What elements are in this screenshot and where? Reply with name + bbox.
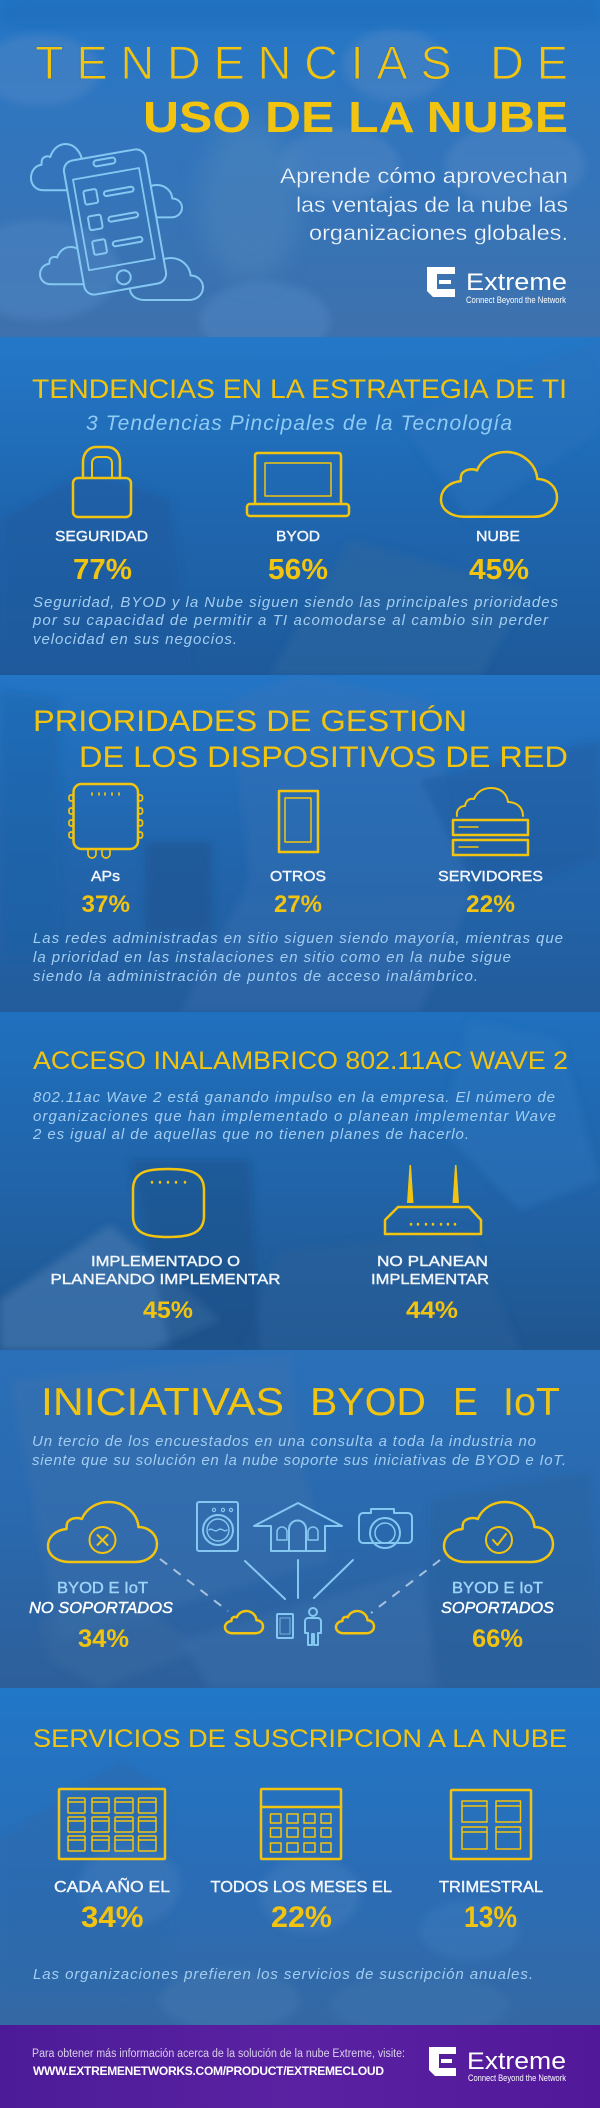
link: extreme networks url: WWW.EXTREMENETWORKS.COM/PRODUCT/EXTREMECLOUD	[33, 2064, 384, 2078]
heading: ACCESO INALAMBRICO 802.11AC WAVE 2	[33, 1047, 568, 1075]
value: 13%: 13%	[464, 1901, 517, 1934]
label: byod: BYOD	[276, 528, 320, 545]
text block: intro: Aprende cómo aprovechan	[280, 164, 568, 188]
text block: priorities summary: la prioridad en las instalaciones en sitio como en la nube sigue	[33, 949, 511, 966]
value: 44%: 44%	[406, 1297, 458, 1324]
label: servidores: SERVIDORES	[438, 868, 543, 885]
label: byod no soportados: BYOD E IoT	[57, 1580, 148, 1597]
text block: intro	[280, 164, 568, 245]
icon: tablet	[277, 1614, 293, 1638]
dashed connectors	[160, 1559, 440, 1613]
title: TENDENCIAS DE	[35, 36, 568, 89]
icon: annual calendar	[59, 1789, 165, 1859]
label: APs: APs	[91, 868, 120, 885]
icon: cloud	[441, 452, 557, 517]
label: no planean implementar: IMPLEMENTAR	[371, 1271, 489, 1288]
label: implementado o planeando implementar: PLANEANDO IMPLEMENTAR	[50, 1271, 281, 1288]
text block: subscription summary: Las organizaciones prefieren los servicios de suscripción anuales.	[33, 1966, 533, 1983]
label: nube: NUBE	[476, 528, 520, 545]
title: USO DE LA NUBE	[143, 93, 568, 142]
text block: priorities summary	[33, 930, 563, 985]
icon: servers with cloud	[453, 788, 528, 855]
value: 45%: 45%	[143, 1297, 193, 1324]
heading	[41, 1381, 560, 1424]
icon: router	[385, 1165, 481, 1234]
text block: byod summary: siente que su solución en la nube soporte sus iniciativas de BYOD e IoT.	[32, 1452, 566, 1469]
icon: monthly calendar	[261, 1789, 341, 1859]
heading: INICIATIVAS	[41, 1381, 284, 1424]
connector lines	[245, 1560, 353, 1599]
label: trimestral: TRIMESTRAL	[439, 1879, 543, 1896]
icon: person	[305, 1608, 321, 1645]
heading: BYOD	[310, 1381, 426, 1424]
text block: footer info: Para obtener más información acerca de la solución de la nube Extreme, visite:	[32, 2048, 405, 2060]
logo: Extreme header: Connect Beyond the Network	[466, 295, 566, 305]
text block: intro: organizaciones globales.	[309, 221, 568, 245]
panel: footer	[0, 2025, 600, 2108]
heading: TENDENCIAS EN LA ESTRATEGIA DE TI	[32, 374, 567, 404]
text block: strategy summary	[32, 594, 559, 648]
logo: Extreme footer	[429, 2047, 566, 2083]
icon: phone with clouds	[31, 144, 203, 300]
icon: lock	[73, 447, 131, 517]
subheading: 3 Tendencias Pincipales de la Tecnología	[86, 412, 512, 435]
logo: Extreme footer: Connect Beyond the Network	[468, 2073, 566, 2083]
text block: wave 2 summary: 2 es igual al de aquellas que no tienen planes de hacerlo.	[32, 1126, 469, 1143]
icon: cloud supported	[444, 1502, 553, 1562]
panel: acceso inalambrico	[0, 1012, 600, 1350]
value: 27%: 27%	[274, 891, 322, 918]
text block: priorities summary: Las redes administradas en sitio siguen siendo mayoría, mientras que	[33, 930, 563, 947]
logo: Extreme header: Extreme	[466, 269, 567, 296]
text block: wave 2 summary: 802.11ac Wave 2 está ganando impulso en la empresa. El número de	[33, 1089, 555, 1106]
label: implementado o planeando implementar: IMPLEMENTADO O	[91, 1253, 240, 1270]
text block: byod summary: Un tercio de los encuestados en una consulta a toda la industria no	[32, 1433, 536, 1450]
label: byod no soportados	[29, 1580, 173, 1617]
icon: washing machine	[197, 1502, 238, 1551]
icon: quarterly calendar	[451, 1790, 531, 1859]
label: seguridad: SEGURIDAD	[55, 528, 148, 545]
icon: house	[254, 1503, 342, 1551]
label: byod soportados	[441, 1580, 554, 1617]
text block: byod summary	[32, 1433, 566, 1469]
value: 22%: 22%	[466, 891, 515, 918]
value: 77%: 77%	[73, 554, 132, 586]
panel: servicios de suscripcion	[0, 1688, 600, 2035]
value: 66%: 66%	[472, 1625, 523, 1653]
label: no planean implementar	[371, 1253, 489, 1288]
panel: iniciativas byod e iot	[0, 1350, 600, 1688]
value: 45%: 45%	[469, 554, 529, 586]
label: byod soportados: SOPORTADOS	[441, 1600, 554, 1617]
label: byod no soportados: NO SOPORTADOS	[29, 1600, 173, 1617]
panel: prioridades de gestion	[0, 675, 600, 1012]
heading: PRIORIDADES DE GESTIÓN	[33, 705, 467, 738]
icon: access point	[69, 784, 142, 858]
label: implementado o planeando implementar	[50, 1253, 281, 1288]
icon: cloud not supported	[48, 1502, 157, 1562]
heading: DE LOS DISPOSITIVOS DE RED	[79, 741, 568, 774]
value: 56%: 56%	[268, 554, 328, 586]
text block: wave 2 summary: organizaciones que han implementado o planean implementar Wave	[33, 1108, 556, 1125]
heading: SERVICIOS DE SUSCRIPCION A LA NUBE	[33, 1725, 567, 1753]
logo: Extreme header	[427, 267, 567, 305]
icon: laptop	[247, 453, 349, 516]
text block: strategy summary: velocidad en sus negocios.	[33, 631, 237, 648]
panel: tendencias en la estrategia de TI	[0, 337, 600, 675]
heading: E	[453, 1381, 478, 1424]
value: 34%: 34%	[81, 1901, 144, 1934]
title	[35, 36, 568, 142]
text block: intro: las ventajas de la nube las	[296, 193, 568, 217]
value: 37%: 37%	[82, 891, 130, 918]
icon: otros device	[279, 791, 318, 852]
label: byod soportados: BYOD E IoT	[452, 1580, 543, 1597]
text block: strategy summary: por su capacidad de permitir a TI acomodarse al cambio sin perder	[32, 612, 549, 629]
icon: small clouds	[225, 1611, 374, 1633]
value: 34%: 34%	[78, 1625, 129, 1653]
text block: strategy summary: Seguridad, BYOD y la Nube siguen siendo las principales prioridades	[33, 594, 559, 611]
value: 22%: 22%	[271, 1901, 332, 1934]
label: no planean implementar: NO PLANEAN	[377, 1253, 488, 1270]
label: todos los meses el: TODOS LOS MESES EL	[210, 1879, 392, 1896]
heading: IoT	[503, 1381, 560, 1424]
icon: wireless access point	[133, 1169, 204, 1237]
label: otros: OTROS	[270, 868, 326, 885]
icon: camera	[359, 1509, 412, 1548]
label: cada año el: CADA AÑO EL	[54, 1876, 170, 1896]
heading	[33, 705, 568, 774]
text block: wave 2 summary	[32, 1089, 556, 1143]
panel: header background	[0, 0, 600, 358]
text block: priorities summary: siendo la administración de puntos de acceso inalámbrico.	[33, 968, 478, 985]
logo: Extreme footer: Extreme	[467, 2048, 566, 2075]
